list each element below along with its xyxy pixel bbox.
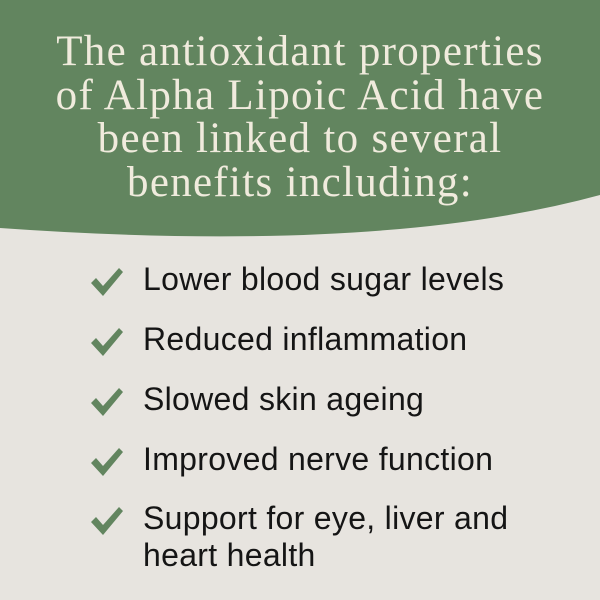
item 4 bbox=[91, 441, 493, 477]
list: benefits bbox=[91, 261, 508, 573]
title: benefits including: bbox=[127, 158, 473, 206]
list: benefits: heart health bbox=[143, 537, 316, 573]
item 3 bbox=[91, 381, 424, 417]
title: The antioxidant properties bbox=[56, 28, 544, 75]
item 2 bbox=[91, 321, 467, 357]
title: of Alpha Lipoic Acid have bbox=[56, 72, 544, 118]
list: benefits: Support for eye, liver and bbox=[143, 500, 508, 536]
item 5 bbox=[91, 500, 508, 573]
title: been linked to several bbox=[98, 115, 502, 162]
list: benefits: Slowed skin ageing bbox=[143, 381, 424, 417]
list: benefits: Lower blood sugar levels bbox=[143, 261, 504, 297]
item 1 bbox=[91, 261, 504, 297]
title bbox=[56, 28, 544, 206]
list: benefits: Improved nerve function bbox=[143, 441, 493, 477]
list: benefits: Reduced inflammation bbox=[143, 321, 467, 357]
